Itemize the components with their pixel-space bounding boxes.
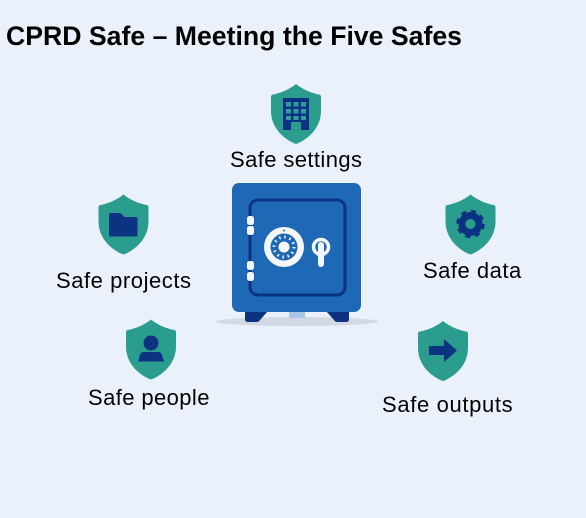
label: safe data: Safe data (423, 258, 522, 283)
label: safe people: Safe people (88, 385, 210, 410)
label: safe settings: Safe settings (230, 147, 362, 172)
label: safe projects: Safe projects (56, 268, 192, 293)
icon: safe people shield (126, 320, 176, 379)
icon: safe data shield (446, 194, 496, 254)
title: CPRD Safe – Meeting the Five Safes (6, 21, 462, 51)
icon: safe settings shield (271, 84, 321, 144)
label: safe outputs: Safe outputs (382, 392, 513, 417)
icon: safe projects shield (98, 194, 148, 254)
icon: safe outputs shield (418, 321, 468, 381)
icon: bank safe (216, 183, 378, 326)
